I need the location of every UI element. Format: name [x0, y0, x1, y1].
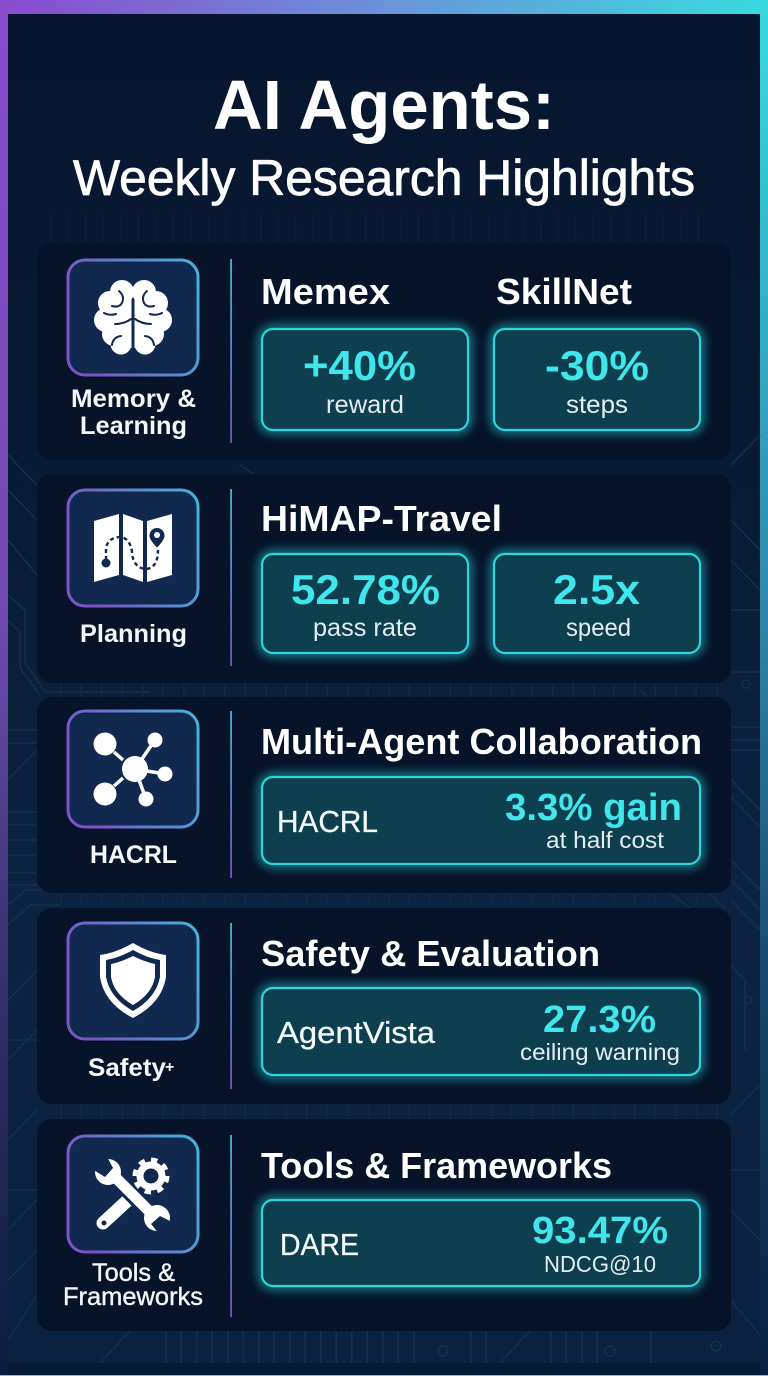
- title: Weekly Research Highlights: [73, 150, 695, 206]
- stat: DARE 93.47%: 93.47%: [532, 1210, 668, 1252]
- heading: Tools & Frameworks: Tools & Frameworks: [261, 1145, 612, 1186]
- stat: +40% reward: [262, 329, 468, 430]
- panel: planning: [37, 474, 731, 683]
- heading: Safety & Evaluation: Safety & Evaluation: [261, 933, 600, 974]
- title: AI Agents:: [213, 66, 555, 144]
- icon: wrench and gear: [68, 1136, 198, 1252]
- stat: 2.5x speed: speed: [566, 614, 631, 642]
- label: tools and frameworks: Frameworks: [63, 1283, 203, 1311]
- stat: AgentVista 27.3%: AgentVista: [277, 1015, 436, 1050]
- label: tools and frameworks: Tools &: [92, 1259, 175, 1287]
- heading: Multi-Agent Collaboration: Multi-Agent Collaboration: [261, 721, 702, 762]
- panel: safety and evaluation: [37, 908, 731, 1104]
- stat: +40% reward: +40%: [303, 342, 416, 389]
- stat: HACRL 3.3% gain: 3.3% gain: [505, 787, 682, 829]
- icon: shield: [68, 923, 198, 1039]
- stat: -30% steps: -30%: [545, 342, 649, 389]
- label: tools and frameworks: [63, 1259, 203, 1311]
- stat: HACRL 3.3% gain: [262, 777, 700, 864]
- label: safety: +: [165, 1059, 174, 1076]
- stat: 52.78% pass rate: pass rate: [313, 614, 417, 642]
- stat: AgentVista 27.3%: 27.3%: [543, 999, 656, 1041]
- label: HACRL: HACRL: [90, 841, 177, 869]
- title: [73, 66, 695, 206]
- stat: HACRL 3.3% gain: at half cost: [546, 827, 665, 853]
- heading: Memex: Memex: [261, 271, 390, 312]
- label: memory and learning: Memory &: [71, 385, 196, 413]
- stat: AgentVista 27.3%: ceiling warning: [520, 1039, 680, 1065]
- stat: HACRL 3.3% gain: HACRL: [277, 804, 378, 839]
- heading: SkillNet: SkillNet: [496, 271, 632, 312]
- stat: AgentVista 27.3%: [262, 988, 700, 1075]
- stat: -30% steps: steps: [566, 391, 628, 419]
- stat: DARE 93.47%: DARE: [280, 1227, 359, 1262]
- stat: -30% steps: [494, 329, 700, 430]
- label: safety: Safety: [88, 1054, 166, 1082]
- icon: brain: [68, 260, 198, 375]
- panel: tools and frameworks: [37, 1119, 731, 1331]
- stat: 52.78% pass rate: [262, 554, 468, 653]
- stat: DARE 93.47%: [262, 1200, 700, 1286]
- stat: 2.5x speed: [494, 554, 700, 653]
- label: memory and learning: [71, 385, 196, 440]
- stat: 2.5x speed: 2.5x: [553, 566, 641, 613]
- icon: network: [68, 711, 198, 827]
- panel: multi-agent collaboration: [37, 697, 731, 893]
- icon: map: [68, 490, 198, 606]
- stat: DARE 93.47%: NDCG@10: [544, 1251, 656, 1277]
- stat: +40% reward: reward: [326, 391, 404, 419]
- label: planning: Planning: [80, 620, 187, 648]
- heading: HiMAP-Travel: HiMAP-Travel: [261, 498, 502, 539]
- stat: 52.78% pass rate: 52.78%: [291, 566, 440, 613]
- label: memory and learning: Learning: [80, 412, 187, 440]
- panel: memory and learning: [37, 243, 731, 460]
